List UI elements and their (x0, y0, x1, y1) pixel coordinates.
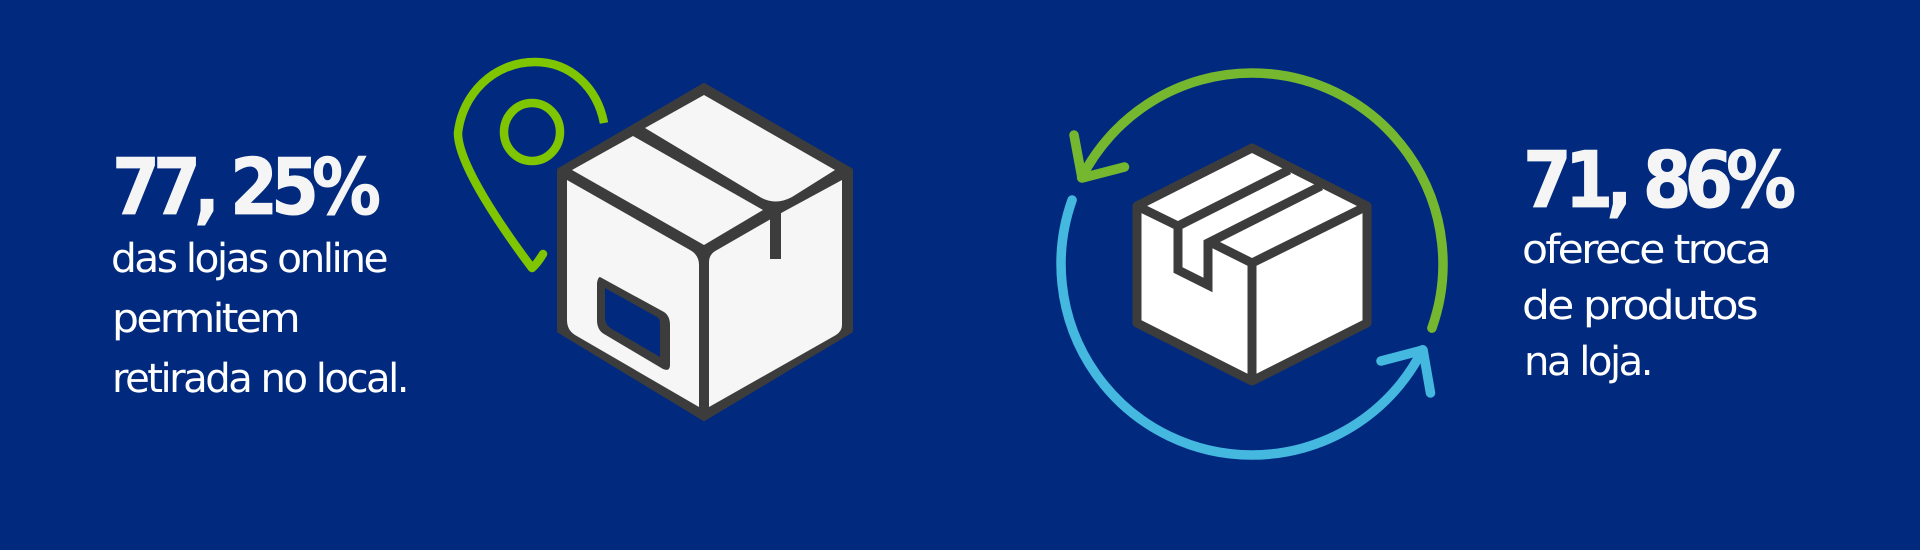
icon: box with tape (1137, 148, 1367, 381)
text block: pickup description: permitem (112, 296, 298, 342)
text block: exchange description: na loja. (1524, 339, 1651, 385)
shipping label window (597, 277, 670, 370)
icon: location pin (458, 62, 604, 268)
statistic: 77,25%: 77, 25% (112, 143, 379, 233)
text block: exchange description: oferece troca (1522, 227, 1769, 273)
icon: cardboard box (559, 85, 851, 419)
text block: exchange description (1522, 227, 1769, 385)
arrow: green return arc (1074, 73, 1443, 328)
statistic: 71,86%: 71, 86% (1523, 136, 1794, 226)
text block: exchange description: de produtos (1522, 283, 1757, 329)
panel: product exchange (1061, 73, 1794, 455)
arrow: blue return arc (1061, 200, 1430, 455)
panel: store pickup (111, 62, 851, 419)
text block: pickup description (111, 236, 407, 402)
text block: pickup description: das lojas online (111, 236, 387, 282)
text block: pickup description: retirada no local. (112, 356, 407, 402)
